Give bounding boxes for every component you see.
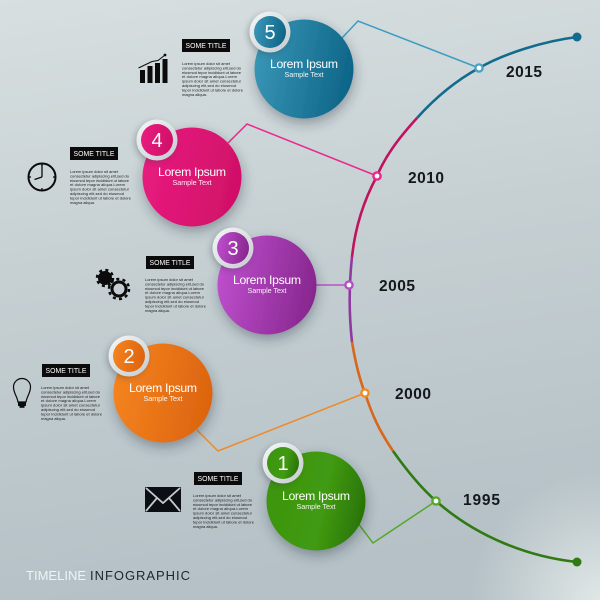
text block: step 1: ipsum dolor sit amet consectetur: [193, 511, 253, 516]
title tag: step 2: [42, 364, 90, 377]
title tag: step 3: SOME TITLE: [150, 260, 191, 267]
text block: step 4: tepor incididunt ut labore et dolore: [70, 195, 132, 200]
text block: step 5: ipsum dolor sit amet consectetur: [182, 79, 242, 84]
title tag: step 4: [70, 147, 118, 160]
connector: step 4: [228, 124, 377, 176]
footer title: TIMELINE: [26, 568, 86, 583]
text block: step 4: eiusmod tepor incididunt ut labore: [70, 178, 130, 183]
connector: step 1: [357, 501, 436, 543]
text block: step 3: adipiscing elit,sed do eiusmod: [145, 299, 199, 304]
text block: step 3: [145, 277, 207, 313]
step 5 circle: Sample Text: [284, 70, 324, 79]
text block: step 1: eiusmod tepor incididunt ut labore: [193, 502, 253, 507]
text block: step 3: magna aliqua.: [145, 308, 170, 313]
step 2 circle: Lorem Ipsum: [129, 381, 197, 395]
text block: step 2: [41, 385, 103, 421]
text block: step 4: et dolore magna aliqua.Lorem: [70, 182, 126, 187]
text block: step 5: adipiscing elit,sed do eiusmod: [182, 83, 236, 88]
title tag: step 1: [194, 472, 242, 485]
text block: step 5: tepor incididunt ut labore et dolore: [182, 87, 244, 92]
step 1 circle: Lorem Ipsum: [282, 489, 350, 503]
timeline arc: [350, 32, 582, 566]
text block: step 1: et dolore magna aliqua.Lorem: [193, 506, 249, 511]
text block: step 4: consectetur adipiscing elit,sed do: [70, 173, 130, 178]
step 2 circle: Sample Text: [144, 394, 182, 403]
year labels: 1995: [463, 492, 500, 509]
year labels: 2000: [395, 386, 431, 403]
text block: step 1: magna aliqua.: [193, 524, 218, 529]
icon: envelope: [145, 487, 181, 512]
step 3 circle: Sample Text: [248, 286, 286, 295]
title tag: step 4: SOME TITLE: [74, 151, 115, 158]
text block: step 3: ipsum dolor sit amet consectetur: [145, 295, 205, 300]
text block: step 4: adipiscing elit,sed do eiusmod: [70, 191, 124, 196]
step 4 circle: Lorem Ipsum: [158, 165, 226, 179]
text block: step 2: magna aliqua.: [41, 416, 66, 421]
step 1 circle: Sample Text: [296, 502, 336, 511]
text block: step 1: Lorem ipsum dolor sit amet: [193, 493, 242, 498]
text block: step 1: consectetur adipiscing elit,sed do: [193, 497, 253, 502]
connector: step 3: [315, 284, 349, 286]
step 5 circle: 5: [264, 22, 276, 44]
text block: step 4: ipsum dolor sit amet consectetur: [70, 187, 130, 192]
text block: step 5: et dolore magna aliqua.Lorem: [182, 74, 238, 79]
timeline nodes: [345, 64, 483, 505]
year labels: 2005: [379, 278, 415, 295]
step 4 circle: [136, 120, 242, 226]
text block: step 5: consectetur adipiscing elit,sed do: [182, 65, 242, 70]
text block: step 2: tepor incididunt ut labore et dolore: [41, 411, 103, 416]
footer title: INFOGRAPHIC: [90, 568, 190, 583]
step 1 circle: 1: [277, 453, 289, 475]
connector: step 2: [197, 393, 365, 451]
text block: step 2: ipsum dolor sit amet consectetur: [41, 403, 101, 408]
text block: step 4: [70, 169, 132, 205]
step 3 circle: 3: [227, 238, 239, 260]
text block: step 3: Lorem ipsum dolor sit amet: [145, 277, 194, 282]
text block: step 5: eiusmod tepor incididunt ut labore: [182, 70, 242, 75]
step 2 circle: [108, 336, 212, 442]
title tag: step 2: SOME TITLE: [46, 368, 87, 375]
text block: step 1: [193, 493, 255, 529]
connector: step 5: [342, 21, 479, 68]
text block: step 3: consectetur adipiscing elit,sed do: [145, 281, 205, 286]
step 4 circle: 4: [151, 130, 163, 152]
step 3 circle: Lorem Ipsum: [233, 273, 301, 287]
text block: step 5: Lorem ipsum dolor sit amet: [182, 61, 231, 66]
year labels: [379, 64, 542, 509]
icon: gears: [97, 270, 129, 299]
icon: bar chart: [138, 54, 168, 83]
step 5 circle: Lorem Ipsum: [270, 57, 338, 71]
text block: step 2: adipiscing elit,sed do eiusmod: [41, 407, 95, 412]
text block: step 2: eiusmod tepor incididunt ut labore: [41, 394, 101, 399]
text block: step 2: Lorem ipsum dolor sit amet: [41, 385, 90, 390]
text block: step 4: magna aliqua.: [70, 200, 95, 205]
text block: step 4: Lorem ipsum dolor sit amet: [70, 169, 119, 174]
icon: clock: [28, 164, 56, 190]
text block: step 2: consectetur adipiscing elit,sed do: [41, 389, 101, 394]
text block: step 5: [182, 61, 244, 97]
text block: step 3: eiusmod tepor incididunt ut labore: [145, 286, 205, 291]
step 1 circle: [262, 442, 366, 550]
text block: step 1: tepor incididunt ut labore et dolore: [193, 519, 255, 524]
year labels: 2015: [506, 64, 542, 81]
year labels: 2010: [408, 170, 444, 187]
icon: light bulb: [14, 378, 30, 408]
text block: step 5: magna aliqua.: [182, 92, 207, 97]
step 3 circle: [212, 228, 316, 334]
step 5 circle: [250, 12, 354, 118]
title tag: step 5: SOME TITLE: [186, 43, 227, 50]
text block: step 3: et dolore magna aliqua.Lorem: [145, 290, 201, 295]
text block: step 2: et dolore magna aliqua.Lorem: [41, 398, 97, 403]
title tag: step 5: [182, 39, 230, 52]
text block: step 3: tepor incididunt ut labore et dolore: [145, 303, 207, 308]
title tag: step 1: SOME TITLE: [198, 476, 239, 483]
footer title: [26, 568, 190, 583]
title tag: step 3: [146, 256, 194, 269]
step 4 circle: Sample Text: [172, 178, 212, 187]
step 2 circle: 2: [123, 346, 135, 368]
text block: step 1: adipiscing elit,sed do eiusmod: [193, 515, 247, 520]
